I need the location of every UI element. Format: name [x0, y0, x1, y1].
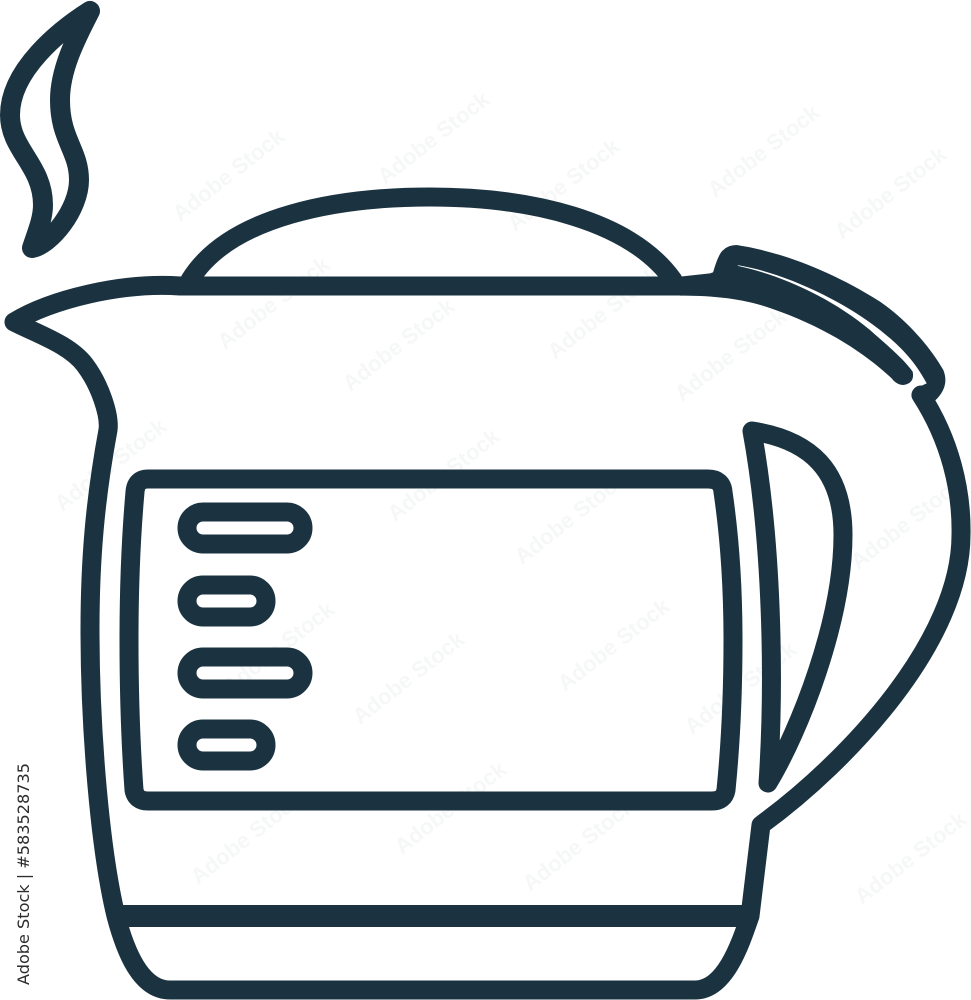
watermark pattern: Adobe Stock — [846, 471, 968, 574]
grip upper band — [712, 245, 945, 403]
watermark pattern: Adobe Stock — [373, 86, 495, 189]
watermark pattern: Adobe Stock — [680, 636, 802, 739]
watermark pattern: Adobe Stock — [168, 123, 290, 226]
watermark pattern: Adobe Stock — [338, 293, 460, 396]
watermark pattern: Adobe Stock — [383, 423, 505, 526]
kettle lid — [190, 197, 673, 280]
watermark pattern: Adobe Stock — [830, 141, 952, 244]
watermark pattern: Adobe Stock — [850, 806, 971, 909]
base band — [112, 905, 750, 927]
watermark pattern: Adobe Stock — [543, 261, 665, 364]
button 2 — [187, 585, 266, 617]
button 1 — [187, 512, 303, 544]
watermark pattern: Adobe Stock — [50, 413, 172, 516]
stock id side text: Adobe Stock | #583528735 — [14, 763, 33, 985]
watermark pattern: Adobe Stock — [213, 251, 335, 354]
watermark pattern: Adobe Stock — [186, 786, 308, 889]
front panel — [129, 479, 733, 801]
button 3 — [187, 657, 303, 689]
kettle body outline — [14, 285, 961, 990]
watermark pattern: Adobe Stock — [553, 593, 675, 696]
watermark pattern: Adobe Stock — [348, 626, 470, 729]
watermark pattern — [50, 86, 971, 909]
watermark pattern: Adobe Stock — [503, 133, 625, 236]
watermark pattern: Adobe Stock — [518, 793, 640, 896]
icon: steam — [10, 11, 90, 248]
panel buttons — [187, 512, 303, 761]
watermark pattern: Adobe Stock — [703, 99, 825, 202]
grip lower band — [680, 264, 913, 385]
watermark pattern: Adobe Stock — [218, 596, 340, 699]
handle grip — [680, 245, 945, 403]
watermark pattern: Adobe Stock — [390, 756, 512, 859]
water window — [752, 431, 843, 783]
button 4 — [187, 729, 266, 761]
watermark pattern: Adobe Stock — [510, 466, 632, 569]
watermark pattern: Adobe Stock — [670, 303, 792, 406]
